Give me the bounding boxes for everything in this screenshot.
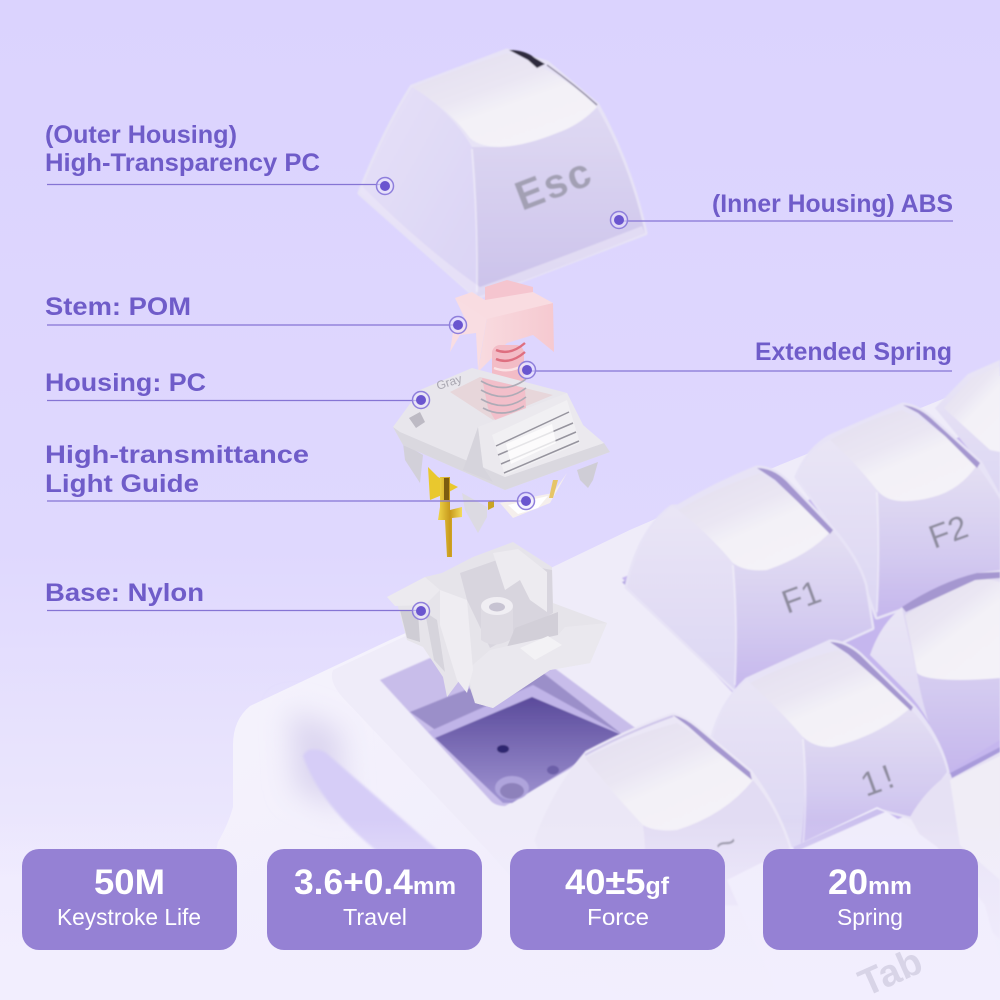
switch housing: Gray xyxy=(435,371,464,393)
label: housing xyxy=(45,369,430,408)
label: housing: Housing: PC xyxy=(45,369,206,397)
shadow beside plate xyxy=(290,710,345,810)
key: 1! xyxy=(700,642,947,850)
stat card: force xyxy=(510,849,725,950)
keyboard body xyxy=(205,376,1000,1000)
stat card: force: Force xyxy=(587,904,649,930)
keycaps on keyboard xyxy=(537,360,1000,1000)
plate xyxy=(332,376,1000,1000)
key: tab xyxy=(727,807,1000,1000)
marker xyxy=(376,178,394,194)
label: outer housing xyxy=(45,121,394,194)
marker xyxy=(412,392,430,408)
stat card: keystroke life: 50M xyxy=(94,863,165,902)
stat card: travel: Travel xyxy=(343,904,407,930)
light guide xyxy=(500,473,567,518)
switch base xyxy=(387,542,607,708)
key: far right top xyxy=(935,360,1000,500)
label: stem xyxy=(45,293,466,334)
spring through opening xyxy=(482,378,526,420)
key: tilde row: ~ xyxy=(709,820,742,866)
stat card: travel xyxy=(267,849,482,950)
marker xyxy=(450,316,466,334)
label: extended spring: Extended Spring xyxy=(755,338,952,366)
legs xyxy=(403,443,423,483)
marker xyxy=(610,212,628,228)
switch stem xyxy=(450,280,554,372)
keycap: Esc xyxy=(360,50,645,297)
marker xyxy=(412,602,430,620)
label: light guide: Light Guide xyxy=(45,470,199,498)
stat card: keystroke life xyxy=(22,849,237,950)
key: F2 xyxy=(797,405,1000,617)
label: base: Base: Nylon xyxy=(45,579,204,607)
stat card: keystroke life: Keystroke Life xyxy=(57,904,201,930)
stat card: spring xyxy=(763,849,978,950)
key: 1!: 1! xyxy=(856,756,903,805)
label: inner housing xyxy=(610,190,953,228)
key: F1: F1 xyxy=(777,573,826,621)
label: light guide xyxy=(45,441,534,510)
marker xyxy=(518,492,534,510)
stat card: travel: 3.6+0.4mm xyxy=(294,863,456,902)
label: inner housing: (Inner Housing) ABS xyxy=(712,190,953,218)
label: stem: Stem: POM xyxy=(45,293,191,321)
label: extended spring xyxy=(518,338,952,378)
key: right middle xyxy=(870,570,1000,772)
key: F2: F2 xyxy=(924,508,973,556)
stat card: spring: Spring xyxy=(837,904,903,930)
bottom fade xyxy=(0,820,1000,1000)
keycap: Esc: Esc xyxy=(509,148,599,219)
switch socket xyxy=(380,658,638,806)
stat card: spring: 20mm xyxy=(828,863,912,902)
gold pins xyxy=(428,467,494,557)
label: outer housing: High-Transparency PC xyxy=(45,149,320,177)
key: lower right xyxy=(910,747,1000,940)
stat card: force: 40±5gf xyxy=(565,863,670,902)
label: light guide: High-transmittance xyxy=(45,441,309,469)
switch housing xyxy=(393,368,610,533)
key: F1 xyxy=(622,468,872,692)
marker xyxy=(518,362,536,378)
label: outer housing: (Outer Housing) xyxy=(45,121,237,149)
key well xyxy=(622,420,1000,860)
spring xyxy=(492,343,525,417)
label: base xyxy=(45,579,430,620)
left slot xyxy=(303,749,440,852)
key: tilde row xyxy=(537,715,790,905)
